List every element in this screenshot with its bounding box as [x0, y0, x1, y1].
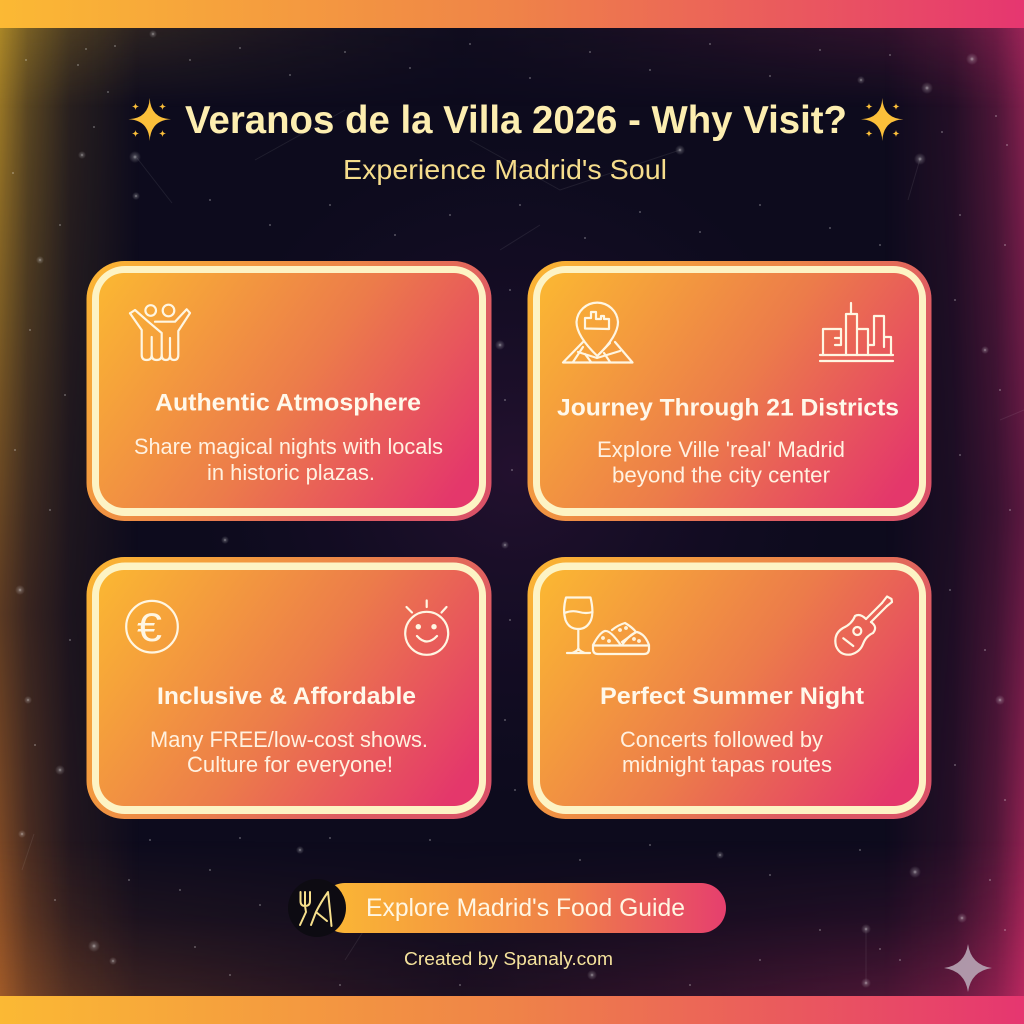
card text	[620, 727, 832, 777]
icon: guitar	[835, 596, 892, 655]
card text: in historic plazas.	[207, 460, 375, 485]
card heading: Authentic Atmosphere	[155, 390, 421, 416]
icon: euro coin: €	[137, 606, 162, 650]
icon: two people cheering	[130, 305, 190, 360]
card text: Explore Ville 'real' Madrid	[597, 437, 845, 462]
card text: Many FREE/low-cost shows.	[150, 727, 428, 752]
button label: Explore Madrid's Food Guide	[366, 894, 685, 922]
icon: wine glass and tapas	[564, 598, 649, 654]
card text: Share magical nights with locals	[134, 434, 443, 459]
icon: map pin with castle	[563, 303, 632, 362]
icon: left sparkles	[128, 98, 171, 141]
card heading: Journey Through 21 Districts	[557, 394, 899, 422]
subtitle: Experience Madrid's Soul	[343, 154, 667, 185]
card heading: Perfect Summer Night	[600, 683, 864, 710]
card text: beyond the city center	[612, 462, 830, 488]
card text	[597, 437, 845, 488]
panel: Perfect Summer Night	[528, 557, 932, 819]
panel: Journey Through 21 Districts	[528, 261, 932, 521]
top gradient bar	[0, 0, 1024, 28]
icon: smiling sun face	[405, 600, 448, 655]
title: Veranos de la Villa 2026 - Why Visit?	[185, 99, 847, 142]
card text	[150, 727, 428, 777]
icon: right sparkles	[861, 98, 904, 141]
icon: city skyline	[820, 303, 893, 361]
card text: midnight tapas routes	[622, 752, 832, 777]
bottom gradient bar	[0, 996, 1024, 1024]
card text	[134, 434, 443, 485]
card heading: Inclusive & Affordable	[157, 683, 416, 710]
icon: euro coin	[126, 601, 178, 652]
card text: Culture for everyone!	[187, 752, 393, 777]
panel: Inclusive & Affordable	[86, 557, 492, 819]
card text: Concerts followed by	[620, 727, 824, 752]
icon: four-point star watermark	[944, 944, 992, 992]
icon: fork and knife badge	[288, 879, 346, 937]
call to action button	[288, 879, 726, 937]
credit line: Created by Spanaly.com	[404, 948, 613, 969]
panel: Authentic Atmosphere	[86, 261, 492, 521]
